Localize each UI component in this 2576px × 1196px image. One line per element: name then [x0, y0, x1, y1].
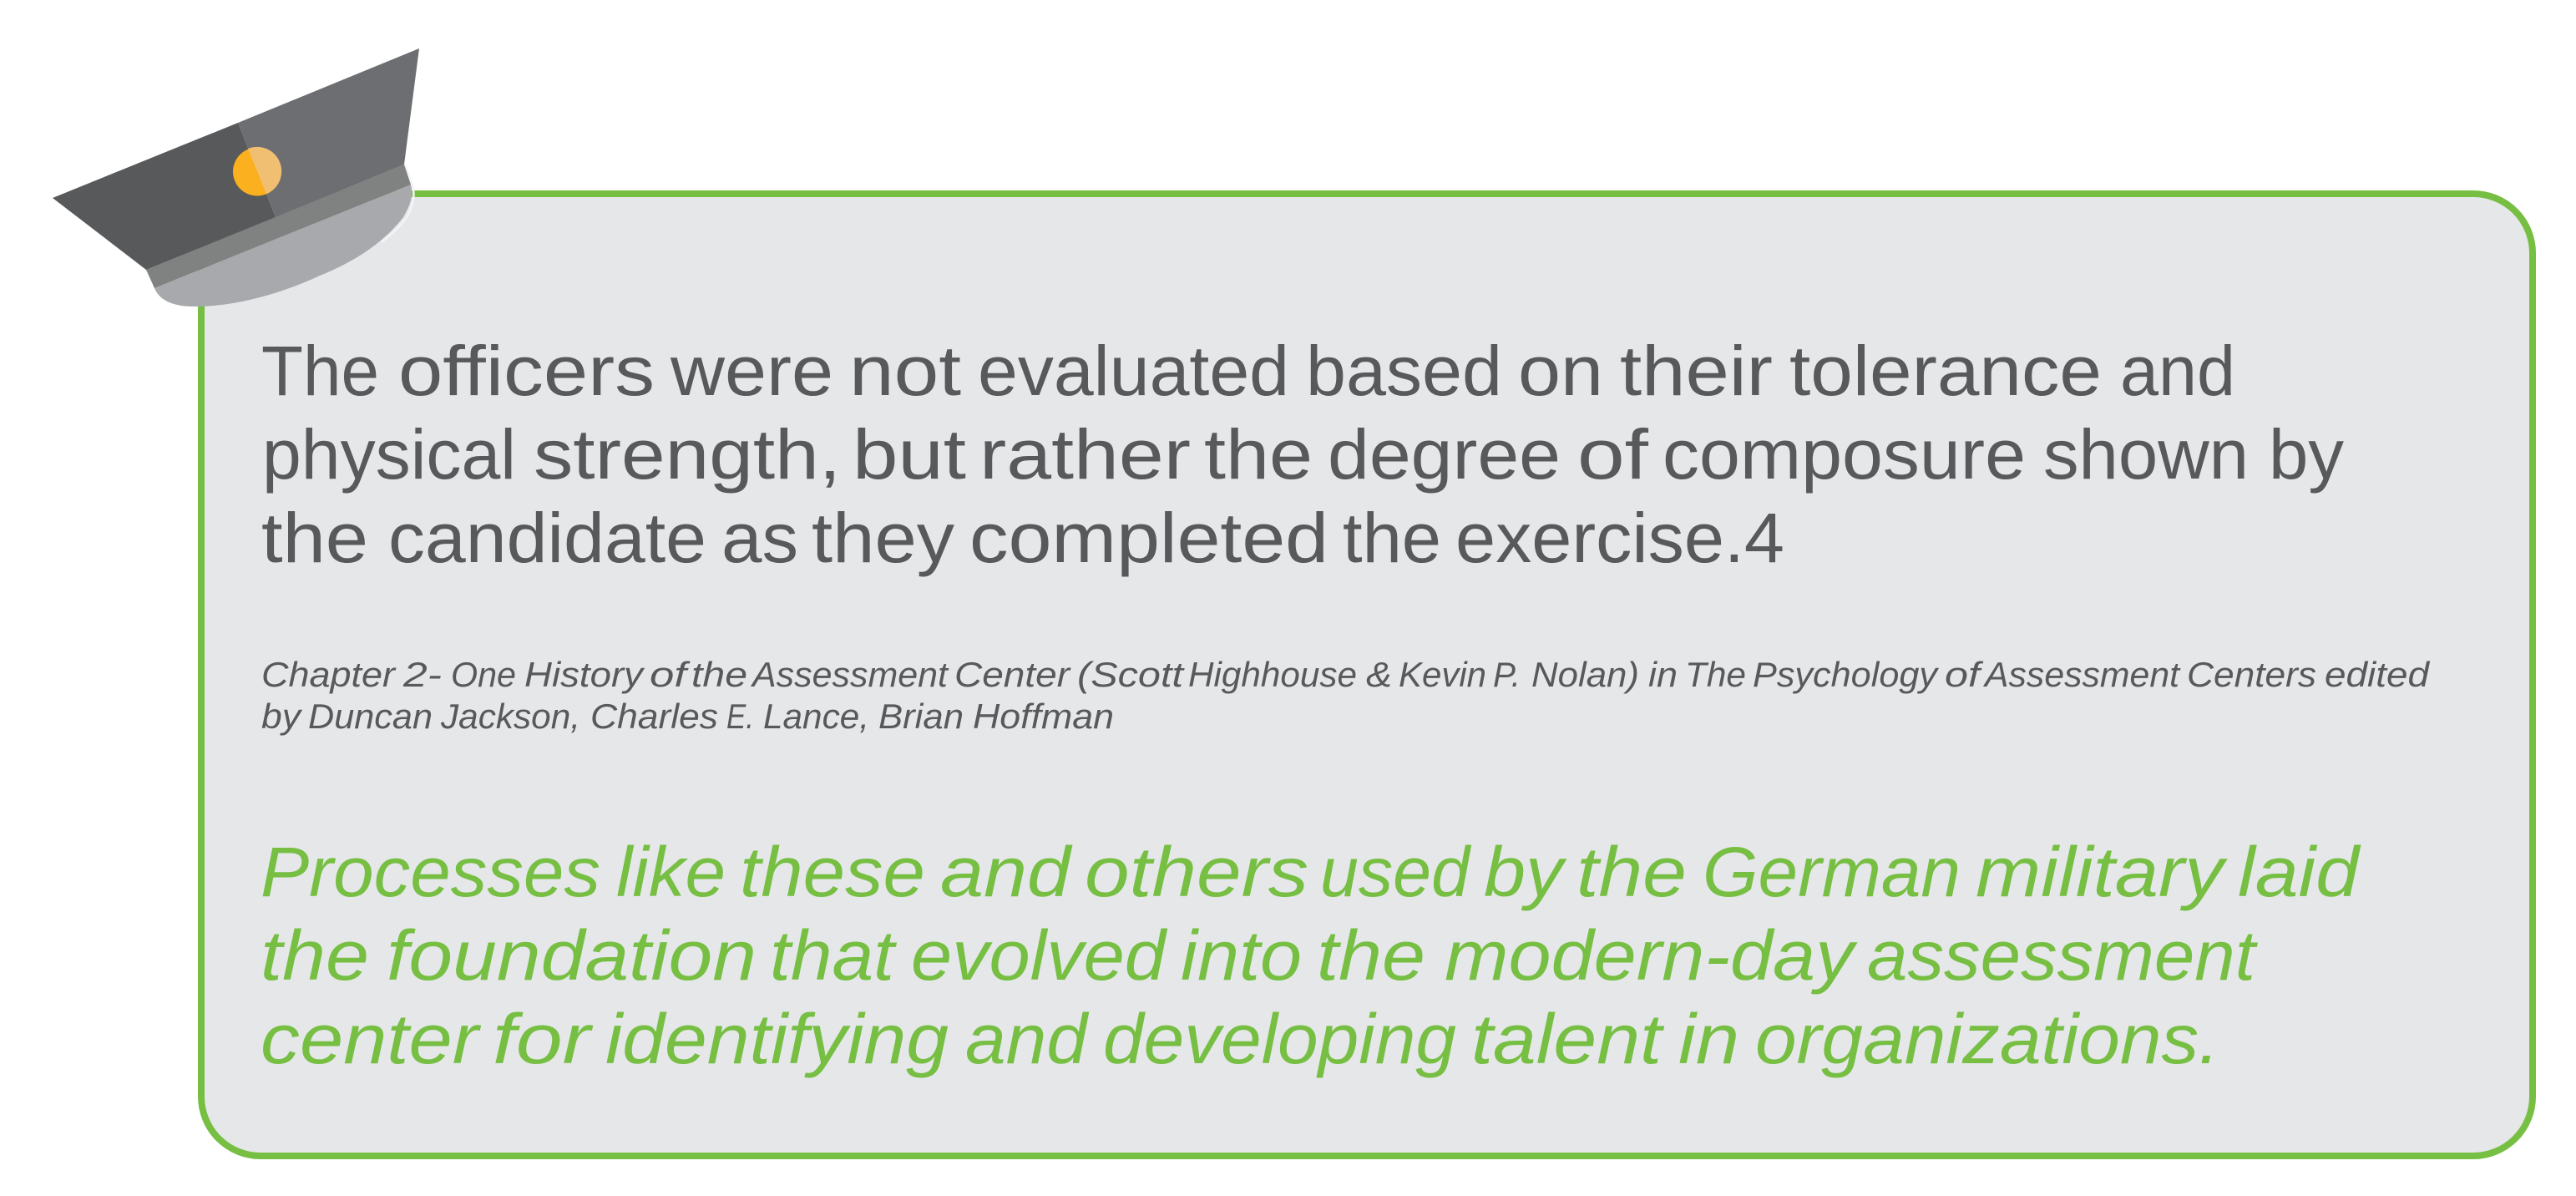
- text block: source citation: Jackson,: [440, 697, 580, 736]
- text block: green conclusion statement: assessment: [1867, 916, 2259, 995]
- text block: officers evaluation statement: officers: [398, 332, 655, 410]
- text block: source citation: P.: [1493, 655, 1521, 694]
- text block: source citation: in: [1648, 655, 1678, 694]
- text block: source citation: 2-: [402, 655, 442, 694]
- text block: source citation: Nolan): [1531, 655, 1639, 694]
- text block: source citation: edited: [2325, 655, 2431, 694]
- text block: green conclusion statement: for: [493, 1000, 594, 1078]
- text block: green conclusion statement: by: [1484, 833, 1567, 911]
- text block: source citation: of: [650, 655, 691, 694]
- text block: source citation: [261, 655, 2431, 736]
- text block: green conclusion statement: others: [1085, 833, 1308, 911]
- text block: green conclusion statement: and: [965, 1000, 1089, 1078]
- text block: source citation: &: [1366, 655, 1392, 694]
- text block: officers evaluation statement: rather: [979, 415, 1191, 494]
- text block: green conclusion statement: the: [1576, 833, 1687, 911]
- text block: source citation: Kevin: [1399, 655, 1486, 694]
- text block: green conclusion statement: and: [940, 833, 1073, 911]
- text block: officers evaluation statement: based: [1306, 332, 1502, 410]
- text block: officers evaluation statement: candidate: [388, 499, 706, 577]
- text block: source citation: History: [524, 655, 645, 694]
- cap visor: [154, 185, 412, 307]
- text block: green conclusion statement: foundation: [387, 916, 757, 995]
- text block: officers evaluation statement: not: [849, 332, 961, 410]
- text block: officers evaluation statement: the: [261, 499, 368, 577]
- text block: source citation: (Scott: [1077, 655, 1186, 694]
- cap badge: [233, 147, 281, 195]
- text block: source citation: Chapter: [261, 655, 397, 694]
- card background: [201, 194, 2533, 1156]
- text block: officers evaluation statement: The: [261, 332, 379, 410]
- text block: source citation: The: [1685, 655, 1746, 694]
- panel: callout card: [201, 194, 2533, 1156]
- text block: officers evaluation statement: physical: [262, 415, 516, 494]
- text block: officers evaluation statement: composure: [1663, 415, 2026, 494]
- text block: source citation: the: [691, 655, 747, 694]
- text block: green conclusion statement: used: [1320, 833, 1471, 911]
- text block: source citation: Assessment: [1982, 655, 2181, 694]
- text block: source citation: Highhouse: [1188, 655, 1357, 694]
- text block: officers evaluation statement: were: [670, 332, 833, 410]
- text block: officers evaluation statement: exercise.4: [1455, 499, 1784, 577]
- text block: green conclusion statement: identifying: [605, 1000, 949, 1078]
- text block: source citation: Assessment: [750, 655, 949, 694]
- text block: green conclusion statement: German: [1703, 833, 1961, 911]
- text block: officers evaluation statement: the: [1204, 415, 1313, 494]
- text block: source citation: Duncan: [308, 697, 433, 736]
- text block: officers evaluation statement: evaluated: [978, 332, 1289, 410]
- text block: officers evaluation statement: by: [2269, 415, 2344, 494]
- text block: officers evaluation statement: but: [853, 415, 966, 494]
- text block: officers evaluation statement: they: [812, 499, 954, 577]
- text block: green conclusion statement: these: [740, 833, 925, 911]
- text block: source citation: E.: [726, 697, 754, 736]
- text block: officers evaluation statement: on: [1518, 332, 1603, 410]
- text block: source citation: Charles: [590, 697, 718, 736]
- text block: green conclusion statement: [261, 833, 2361, 1078]
- cap band: [146, 165, 411, 288]
- text block: source citation: One: [451, 655, 516, 694]
- text block: green conclusion statement: that: [770, 916, 898, 995]
- text block: source citation: of: [1945, 655, 1984, 694]
- text block: green conclusion statement: modern-day: [1445, 916, 1858, 995]
- text block: source citation: Centers: [2187, 655, 2316, 694]
- text block: green conclusion statement: the: [1317, 916, 1425, 995]
- text block: officers evaluation statement: the: [1343, 499, 1441, 577]
- text block: source citation: Center: [954, 655, 1071, 694]
- text block: green conclusion statement: the: [261, 916, 369, 995]
- text block: green conclusion statement: developing: [1103, 1000, 1456, 1078]
- text block: green conclusion statement: center: [261, 1000, 481, 1078]
- text block: green conclusion statement: into: [1181, 916, 1302, 995]
- text block: officers evaluation statement: and: [2120, 332, 2235, 410]
- text block: green conclusion statement: like: [616, 833, 726, 911]
- text block: officers evaluation statement: shown: [2043, 415, 2249, 494]
- text block: officers evaluation statement: their: [1620, 332, 1773, 410]
- text block: source citation: by: [261, 697, 303, 736]
- text block: green conclusion statement: in: [1678, 1000, 1739, 1078]
- text block: officers evaluation statement: of: [1577, 415, 1649, 494]
- text block: source citation: Psychology: [1753, 655, 1940, 694]
- text block: officers evaluation statement: strength,: [534, 415, 841, 494]
- text block: officers evaluation statement: tolerance: [1789, 332, 2102, 410]
- text block: green conclusion statement: laid: [2238, 833, 2361, 911]
- text block: source citation: Hoffman: [973, 697, 1114, 736]
- text block: green conclusion statement: talent: [1471, 1000, 1665, 1078]
- text block: officers evaluation statement: degree: [1328, 415, 1561, 494]
- text block: green conclusion statement: military: [1976, 833, 2229, 911]
- cap crown left side: [53, 123, 276, 270]
- text block: green conclusion statement: Processes: [261, 833, 600, 911]
- text block: source citation: Brian: [878, 697, 964, 736]
- text block: officers evaluation statement: completed: [969, 499, 1328, 577]
- text block: officers evaluation statement: [261, 332, 2344, 577]
- text block: green conclusion statement: organizations.: [1755, 1000, 2219, 1078]
- text block: source citation: Lance,: [763, 697, 869, 736]
- icon: officer cap: [53, 48, 419, 307]
- cap crown right side: [238, 48, 419, 217]
- text block: officers evaluation statement: as: [721, 499, 798, 577]
- cap outline highlight: [382, 165, 413, 242]
- text block: green conclusion statement: evolved: [911, 916, 1167, 995]
